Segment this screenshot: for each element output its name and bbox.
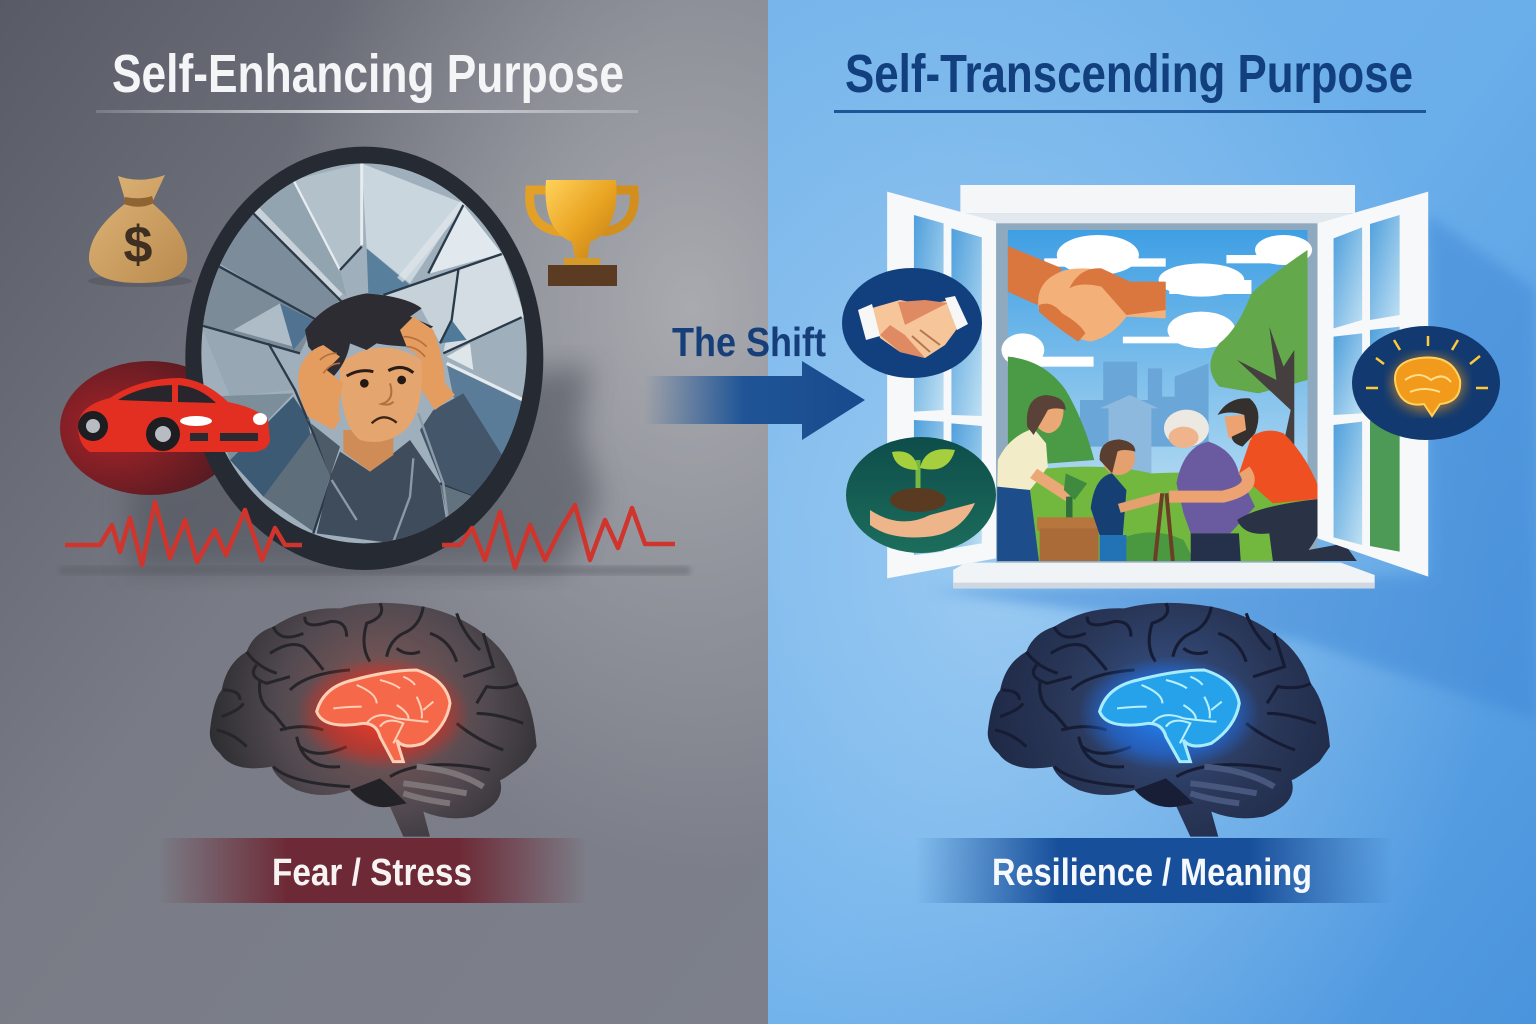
person: sweater and jacket [307, 393, 505, 543]
brain: resilience and meaning [988, 603, 1330, 837]
elderly woman [1155, 410, 1255, 561]
window frame top [960, 185, 1355, 563]
arrow: The Shift: The Shift [672, 319, 826, 365]
mirror frame [185, 147, 543, 570]
label band: Fear / Stress [158, 838, 588, 903]
left panel background [0, 0, 768, 1024]
mirror with distressed person [180, 147, 547, 570]
stress pulse line right [442, 505, 675, 568]
label band: Resilience / Meaning [915, 838, 1393, 903]
icon: glowing brain badge [1352, 326, 1500, 440]
icon: money bag: $ [124, 216, 153, 274]
scene trees and ground [1008, 250, 1307, 561]
label band: Resilience / Meaning: Resilience / Meaning [992, 852, 1312, 894]
person: head [305, 293, 433, 472]
icon: car badge circle [60, 361, 240, 495]
person: hands [298, 317, 455, 430]
crack lines [200, 205, 522, 533]
left shutter [887, 192, 996, 578]
woman planting [997, 395, 1069, 561]
child [1091, 439, 1162, 561]
scene sky and clouds [1001, 230, 1312, 561]
right panel background [768, 0, 1536, 1024]
window scene [887, 185, 1428, 588]
mirror glass shards [201, 163, 527, 544]
heading: Self-Transcending Purpose: Self-Transcending Purpose [845, 44, 1413, 104]
icon: seedling in hand badge [846, 437, 996, 553]
planter box [1037, 473, 1102, 561]
bearded man [1169, 398, 1357, 561]
heading: Self-Enhancing Purpose: Self-Enhancing Purpose [112, 44, 624, 104]
stress pulse line left [65, 502, 302, 565]
label band: Fear / Stress: Fear / Stress [272, 852, 472, 894]
window sill [953, 563, 1375, 588]
icon: handshake badge [842, 268, 982, 378]
arrow: The Shift [644, 319, 865, 440]
icon: trophy [530, 180, 634, 286]
large handshake [1008, 246, 1166, 342]
icon: red car [78, 378, 270, 452]
scene city skyline [1080, 362, 1209, 473]
brain: fear and stress [210, 603, 537, 837]
icon: money bag [88, 175, 192, 287]
right shutter [1317, 192, 1428, 577]
